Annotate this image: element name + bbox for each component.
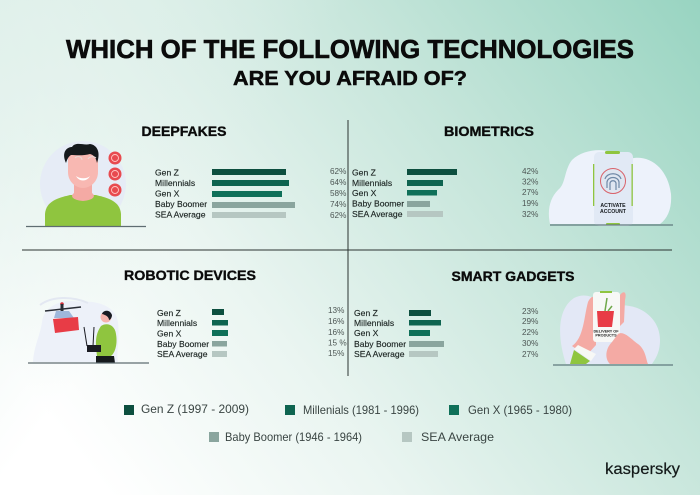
bar chart: smart gadgets: Gen X <box>354 328 379 338</box>
icon: person flying delivery drone <box>28 298 149 363</box>
legend: Gen Z (1997 - 2009) <box>141 403 249 416</box>
panel: deepfakes <box>26 124 346 227</box>
bar chart: smart gadgets: Gen Z <box>354 308 378 318</box>
panel: biometrics <box>352 124 673 226</box>
bar chart: smart gadgets: 23% <box>522 307 538 316</box>
icon: phone with fingerprint <box>549 150 673 226</box>
bar chart: robotic devices: Millennials <box>157 318 197 328</box>
bar chart: smart gadgets <box>354 307 538 359</box>
bar chart: deepfakes <box>155 167 346 220</box>
bar chart: robotic devices: 16% <box>328 328 344 337</box>
bar chart: smart gadgets: 22% <box>522 328 538 337</box>
title <box>66 36 634 90</box>
bar chart: deepfakes: 62% <box>330 211 346 220</box>
title: ARE YOU AFRAID OF? <box>233 68 467 90</box>
bar chart: biometrics: 32% <box>522 178 538 186</box>
icon: hands holding phone: DELIVERY OF <box>593 330 619 334</box>
icon: smiling man with emotion badges <box>26 141 146 227</box>
legend <box>124 403 572 444</box>
heading: deepfakes: DEEPFAKES <box>142 124 226 139</box>
bar chart: smart gadgets: SEA Average <box>354 349 405 359</box>
bar chart: deepfakes: Millennials <box>155 178 195 188</box>
bar chart: deepfakes: 64% <box>330 178 346 187</box>
legend: Gen X (1965 - 1980) <box>468 404 572 417</box>
bar chart: robotic devices: SEA Average <box>157 349 208 359</box>
bar chart: biometrics: 42% <box>522 167 538 176</box>
bar chart: biometrics <box>352 167 538 219</box>
bar chart: smart gadgets: 27% <box>522 350 538 359</box>
bar chart: robotic devices: Baby Boomer <box>157 339 209 349</box>
bar chart: smart gadgets: Millennials <box>354 318 394 328</box>
bar chart: smart gadgets: Baby Boomer <box>354 339 406 349</box>
heading: biometrics: BIOMETRICS <box>444 124 534 139</box>
bar chart: biometrics: Gen X <box>352 188 377 198</box>
bar chart: deepfakes: 62% <box>330 167 346 176</box>
bar chart: robotic devices: 16% <box>328 317 344 326</box>
emotion badges <box>108 152 122 196</box>
panel: smart gadgets <box>354 269 673 365</box>
bar chart: smart gadgets: 29% <box>522 317 538 326</box>
icon: phone with fingerprint: ACTIVATE <box>600 203 626 209</box>
bar chart: biometrics: SEA Average <box>352 209 403 219</box>
bar chart: robotic devices: Gen X <box>157 328 182 338</box>
bar chart: biometrics: 32% <box>522 210 538 219</box>
bar chart: robotic devices: 13% <box>328 306 344 315</box>
bar chart: deepfakes: SEA Average <box>155 210 206 220</box>
bar chart: deepfakes: Gen X <box>155 188 180 198</box>
bar chart: biometrics: Baby Boomer <box>352 198 404 208</box>
bar chart: deepfakes: 58% <box>330 189 346 198</box>
heading: smart gadgets: SMART GADGETS <box>452 269 574 284</box>
bar chart: smart gadgets: 30% <box>522 339 538 348</box>
heading: robotic devices: ROBOTIC DEVICES <box>124 268 256 283</box>
logo: kaspersky: kaspersky <box>605 461 680 478</box>
bar chart: biometrics: 19% <box>522 199 538 208</box>
bar chart: biometrics: 27% <box>522 188 538 197</box>
legend: Baby Boomer (1946 - 1964) <box>225 431 362 444</box>
bar chart: deepfakes: Baby Boomer <box>155 199 207 209</box>
bar chart: robotic devices: Gen Z <box>157 308 181 318</box>
legend: Millenials (1981 - 1996) <box>303 404 419 417</box>
panel: robotic devices <box>28 268 347 363</box>
bar chart: biometrics: Millennials <box>352 178 392 188</box>
bar chart: biometrics: Gen Z <box>352 168 376 178</box>
icon: phone with fingerprint: ACCOUNT <box>600 209 627 215</box>
icon: hands holding phone: PRODUCTS <box>595 334 617 338</box>
icon: hands holding phone <box>553 291 673 365</box>
bar chart: robotic devices <box>157 306 347 359</box>
bar chart: robotic devices: 15% <box>328 349 344 358</box>
bar chart: robotic devices: 15 % <box>328 338 347 348</box>
legend: SEA Average <box>421 431 494 444</box>
bar chart: deepfakes: 74% <box>330 200 346 209</box>
title: WHICH OF THE FOLLOWING TECHNOLOGIES <box>66 36 634 64</box>
bar chart: deepfakes: Gen Z <box>155 168 179 178</box>
